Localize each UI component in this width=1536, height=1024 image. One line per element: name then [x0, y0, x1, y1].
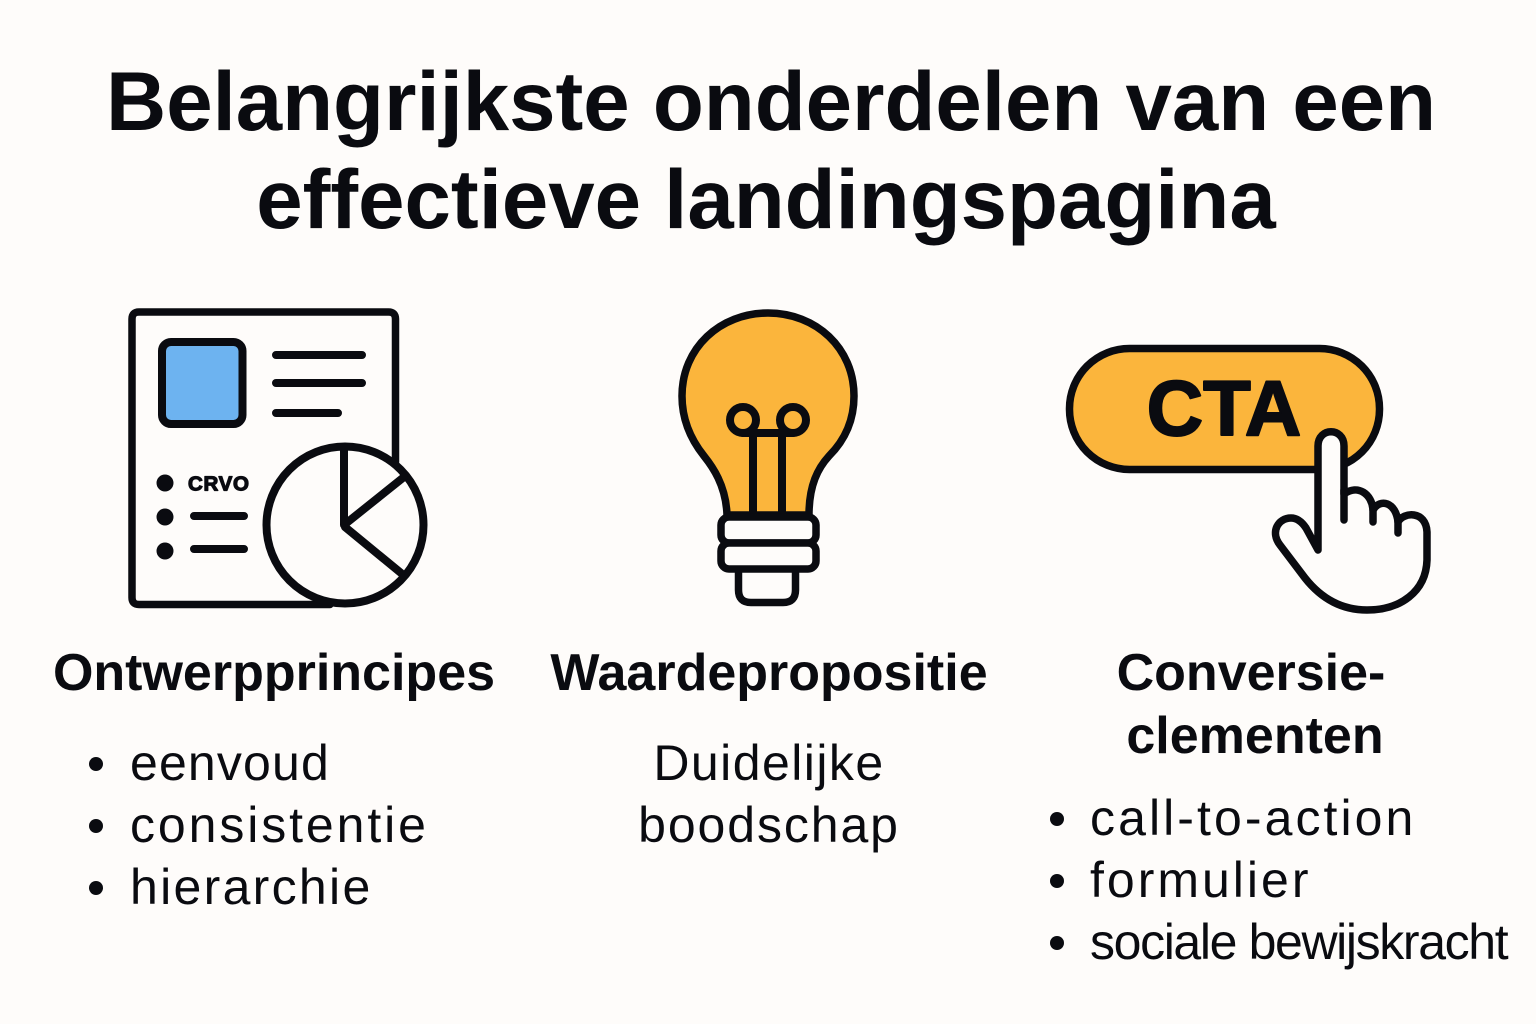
icon: page with chart: CRVO [188, 472, 249, 496]
icon: CTA button with pointer: CTA [1147, 364, 1301, 452]
heading: Ontwerpprincipes: Ontwerpprincipes [53, 644, 495, 702]
list: Ontwerpprincipes: consistentie [130, 797, 429, 853]
icon: page with chart [132, 312, 424, 604]
list: Conversie-elementen: sociale bewijskracht [1090, 914, 1507, 970]
heading: Conversie-elementen: clementen [1126, 707, 1384, 765]
heading: Conversie-elementen: Conversie- [1117, 644, 1385, 702]
list: Ontwerpprincipes: hierarchie [130, 859, 373, 915]
title: effectieve landingspagina [256, 153, 1276, 246]
list: Ontwerpprincipes: eenvoud [130, 735, 330, 791]
heading: Waardepropositie: Waardepropositie [550, 644, 988, 702]
text: Duidelijke boodschap: boodschap [638, 797, 900, 853]
icon: light bulb [682, 313, 854, 602]
list: Conversie-elementen: formulier [1090, 852, 1311, 908]
icon: CTA button with pointer [1070, 348, 1427, 610]
text: Duidelijke boodschap: Duidelijke [653, 735, 885, 791]
title [106, 55, 1436, 246]
list: Ontwerpprincipes [89, 735, 429, 915]
heading: Conversie-elementen [1117, 644, 1385, 765]
text: Duidelijke boodschap [638, 735, 900, 853]
title: Belangrijkste onderdelen van een [106, 55, 1436, 148]
list: Conversie-elementen [1050, 790, 1508, 970]
list: Conversie-elementen: call-to-action [1090, 790, 1416, 846]
